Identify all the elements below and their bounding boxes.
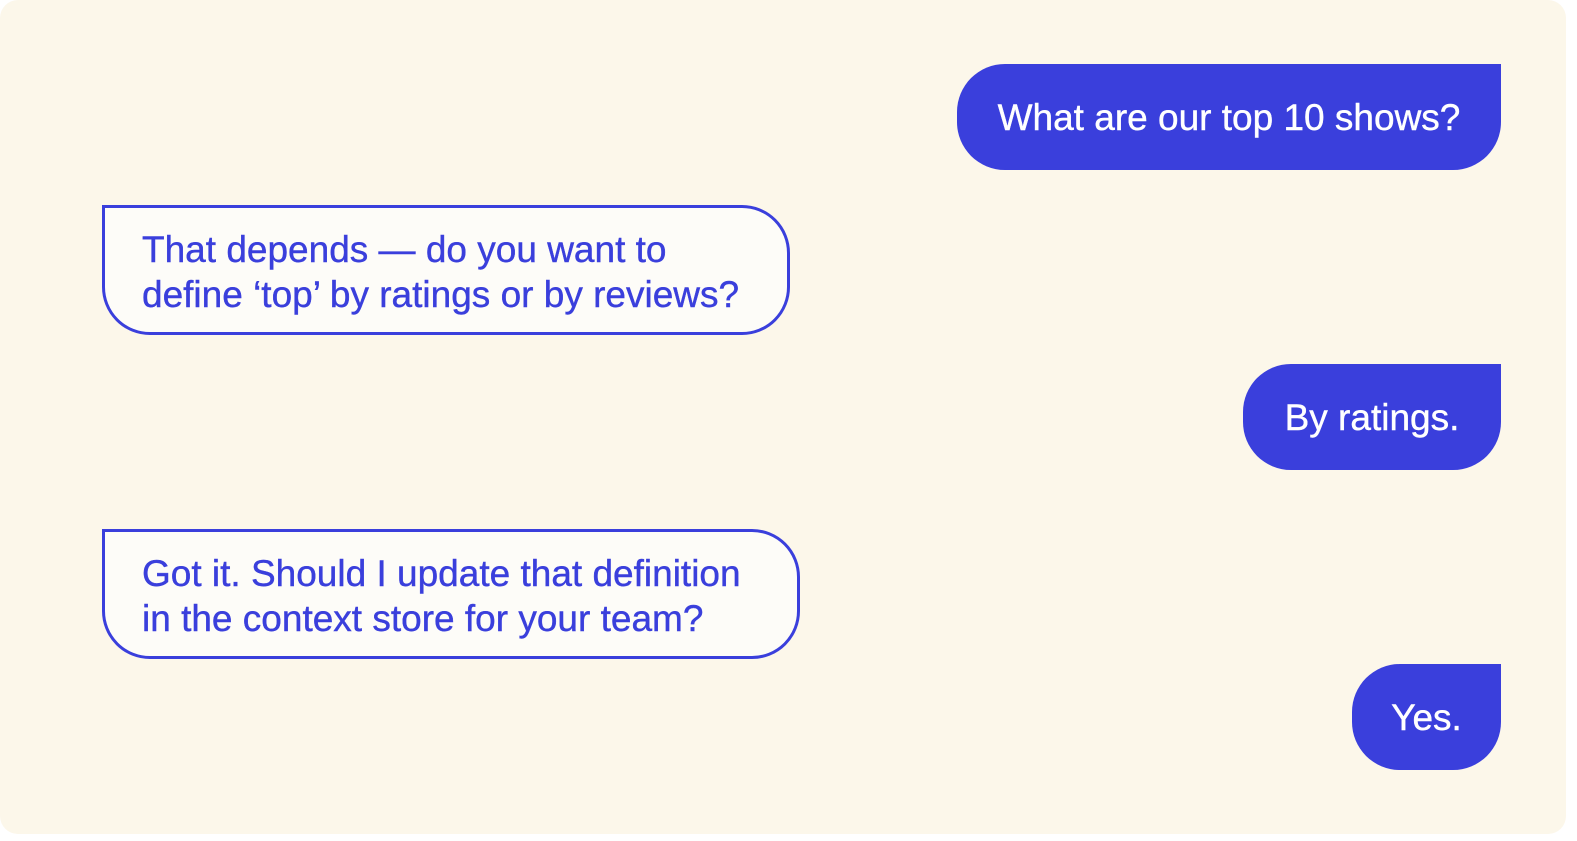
user bubble: by ratings: By ratings. [1285, 396, 1459, 438]
assistant bubble: update definition [102, 529, 800, 659]
user bubble: yes [1352, 664, 1501, 770]
assistant bubble: depends [102, 205, 790, 335]
user bubble: top 10 shows [957, 64, 1501, 170]
user bubble: by ratings [1243, 364, 1501, 470]
assistant bubble: depends: define ‘top’ by ratings or by reviews? [142, 274, 739, 315]
assistant bubble: depends: That depends — do you want to [142, 229, 667, 270]
assistant bubble: update definition: Got it. Should I update that definition [142, 553, 741, 594]
assistant bubble: update definition: in the context store for your team? [142, 598, 703, 639]
user bubble: yes: Yes. [1391, 696, 1462, 738]
user bubble: top 10 shows: What are our top 10 shows? [998, 96, 1460, 138]
